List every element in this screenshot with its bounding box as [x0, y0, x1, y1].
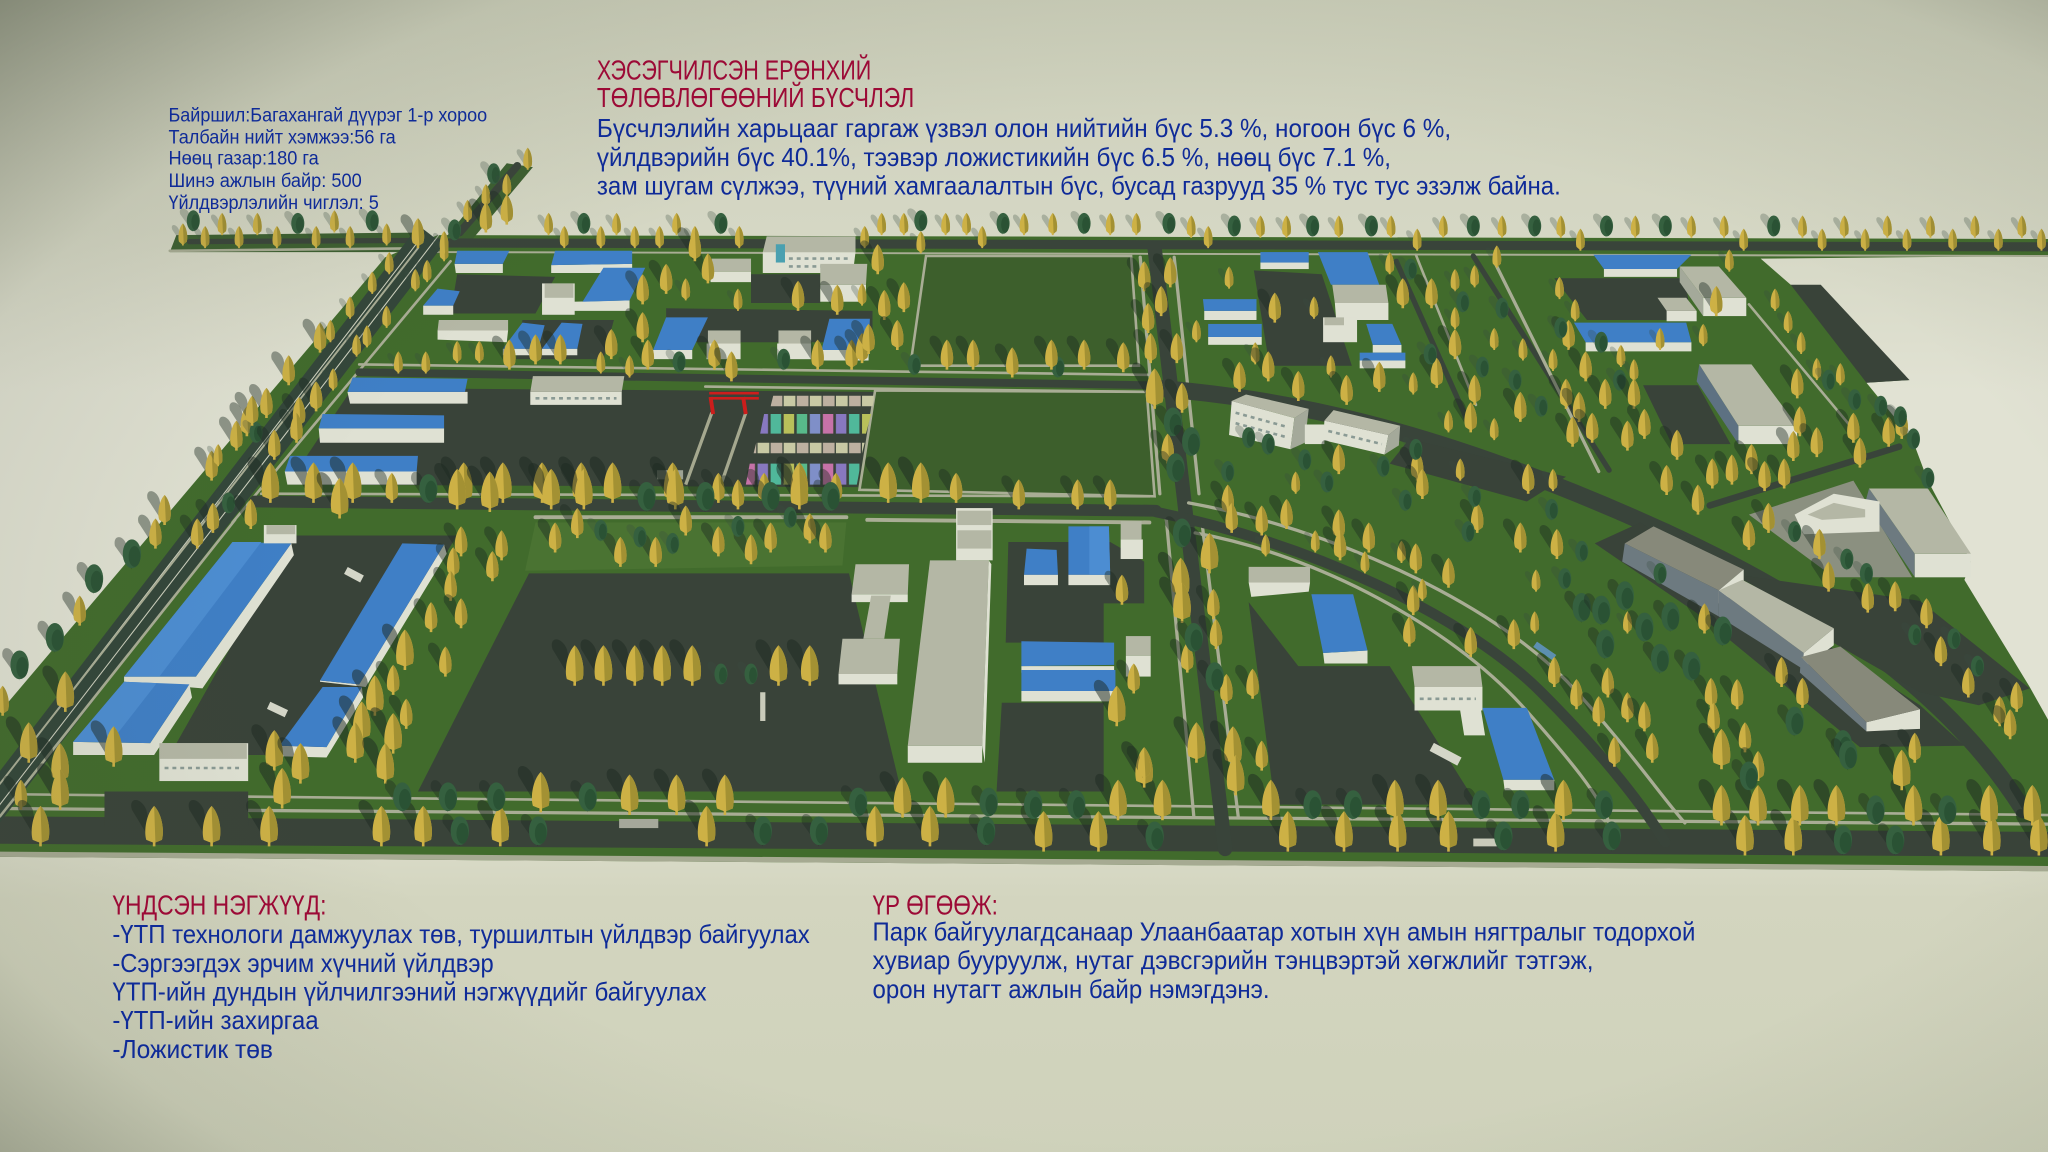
north field — [910, 256, 1139, 366]
east-west road one — [359, 372, 1156, 385]
west branch strip — [170, 232, 438, 252]
benefit text block — [872, 889, 1695, 1004]
office yard — [751, 274, 820, 303]
south-west entrance — [104, 792, 248, 825]
middle east-west row — [247, 456, 1116, 519]
vehicles — [267, 470, 1556, 846]
site facts text block — [168, 105, 487, 214]
building L — [551, 251, 632, 273]
north-south lanes — [1396, 261, 1468, 422]
connector block — [1305, 424, 1324, 444]
south-east yard — [1249, 602, 1477, 805]
north-west yard — [451, 274, 555, 313]
annex — [1459, 703, 1485, 735]
logistics terminal — [686, 393, 875, 485]
site facts text block: Үйлдвэрлэлийн чиглэл: 5 — [168, 193, 379, 214]
crane rails — [686, 413, 746, 485]
zoning description: үйлдвэрийн бүс 40.1%, тээвэр ложистикийн бүс 6.5 %, нөөц бүс 7.1 %, — [597, 142, 1391, 172]
building P — [438, 320, 508, 342]
building M — [572, 268, 645, 311]
building AH — [1260, 252, 1309, 269]
lawn above the main yard — [525, 522, 846, 571]
blue hall AB — [1068, 526, 1110, 585]
building X — [822, 319, 870, 360]
box F — [264, 525, 296, 543]
asphalt yards — [170, 270, 2030, 805]
building K — [455, 251, 509, 273]
zoning description — [597, 113, 1561, 201]
main units text block: -Сэргээгдэх эрчим хүчний үйлдвэр — [112, 948, 494, 978]
title: ТӨЛӨВЛӨГӨӨНИЙ БҮСЧЛЭЛ — [597, 82, 914, 113]
central road — [1155, 248, 1225, 849]
shed column trees — [251, 522, 508, 808]
blue hall AE — [1021, 641, 1114, 673]
building AT — [1697, 364, 1797, 444]
long plant Y — [908, 560, 991, 763]
shed yard — [170, 536, 457, 755]
benefit text block: ҮР ӨГӨӨЖ: — [872, 889, 998, 920]
west road trees — [0, 231, 448, 810]
title — [597, 55, 914, 113]
office C — [159, 743, 248, 781]
warehouse I — [285, 456, 418, 485]
box AD — [1121, 521, 1143, 559]
building AI — [1318, 252, 1379, 285]
apartment block two — [1323, 410, 1400, 455]
benefit text block: хувиар бууруулж, нутаг дэвсгэрийн тэнцвэртэй хөгжлийг тэтгэж, — [872, 945, 1593, 975]
zoning description: Бүсчлэлийн харьцааг гаргаж үзвэл олон нийтийн бүс 5.3 %, ногоон бүс 6 %, — [597, 113, 1451, 143]
site facts text block: Байршил:Багахангай дүүрэг 1-р хороо — [168, 105, 487, 126]
north road — [431, 243, 2048, 247]
main factory yard — [418, 573, 901, 792]
trees — [0, 148, 2048, 856]
apartment block one — [1229, 394, 1309, 449]
shed D — [320, 543, 447, 687]
H-shaped building — [839, 564, 909, 684]
green fields — [525, 256, 1155, 571]
building Q — [503, 323, 583, 355]
box T — [820, 264, 867, 302]
main units text block: ҮНДСЭН НЭГЖҮҮД: — [112, 889, 327, 920]
site facts text block: Шинэ ажлын байр: 500 — [168, 171, 362, 192]
north-west cluster trees — [387, 227, 1130, 381]
site facts text block: Нөөц газар:180 га — [168, 149, 319, 170]
north-east yards — [1554, 278, 1691, 320]
main office R — [763, 236, 856, 273]
main units text block: -Ложистик төв — [112, 1034, 273, 1064]
main units text block: -ҮТП технологи дамжуулах төв, туршилтын үйлдвэр байгуулах — [112, 919, 810, 949]
north-east curved road — [1155, 388, 2023, 810]
zoning description: зам шугам сүлжээ, түүний хамгаалалтын бүс, бусад газрууд 35 % тус тус эзэлж байна. — [597, 171, 1561, 201]
building AK — [1203, 299, 1256, 320]
container rows — [746, 396, 875, 485]
building AM — [1323, 317, 1357, 342]
building W — [777, 330, 811, 359]
south main road — [0, 816, 2048, 858]
building AR — [1657, 298, 1697, 321]
building AQ — [1680, 266, 1746, 316]
south-east curved road — [1156, 512, 1665, 842]
park trees — [1210, 425, 1921, 792]
main units text block: -ҮТП-ийн захиргаа — [112, 1005, 319, 1035]
lawn and yard trees — [538, 502, 832, 686]
buildings — [73, 236, 1971, 790]
site plan — [0, 148, 2048, 871]
office J — [530, 376, 624, 405]
arched hall two — [1800, 647, 1920, 731]
building BA — [1482, 708, 1554, 790]
building AX — [1311, 594, 1368, 664]
building AZ — [1412, 666, 1482, 711]
box S — [711, 259, 751, 282]
green site ground — [0, 235, 2048, 871]
shed B — [73, 682, 192, 755]
blue hall AF — [1021, 670, 1115, 701]
south block yard — [1006, 542, 1144, 643]
office block BD — [1719, 580, 1834, 669]
main units text block — [112, 889, 810, 1064]
main units text block: ҮТП-ийн дундын үйлчилгээний нэгжүүдийг байгуулах — [112, 976, 707, 1006]
building AS — [1574, 323, 1691, 351]
octagonal office — [1795, 494, 1880, 534]
building U — [653, 317, 708, 359]
road network — [0, 235, 2048, 871]
building AO — [1360, 353, 1405, 368]
west diagonal road — [0, 235, 431, 831]
perimeter parking — [1791, 285, 1910, 383]
access road strip — [447, 163, 533, 240]
building AP — [1593, 255, 1691, 277]
north rows — [172, 148, 2046, 251]
storage yard — [287, 388, 875, 487]
tower N — [542, 283, 575, 315]
site facts text block: Талбайн нийт хэмжээ:56 га — [168, 128, 396, 149]
blue hall AC — [1024, 549, 1058, 585]
building AL — [1208, 324, 1262, 345]
building V — [707, 330, 741, 359]
red gantry crane — [709, 393, 759, 414]
building AW — [1249, 567, 1310, 597]
tower Z — [956, 508, 993, 560]
title: ХЭСЭГЧИЛСЭН ЕРӨНХИЙ — [597, 55, 871, 86]
building AN — [1366, 324, 1401, 353]
arched hall one — [1622, 526, 1744, 616]
east-west road two — [255, 502, 1156, 511]
shed A — [124, 542, 294, 688]
east road trees — [1732, 499, 2023, 739]
warehouse G — [347, 377, 468, 404]
shed E — [280, 687, 363, 758]
south rows — [18, 766, 2048, 856]
central field — [859, 391, 1155, 496]
north-centre yard — [1254, 270, 1352, 366]
large building BF — [1865, 488, 1971, 577]
box AG — [1126, 636, 1151, 677]
central road trees — [1094, 253, 1268, 795]
warehouse H — [319, 414, 444, 443]
north-east block trees — [1185, 246, 1934, 515]
paved plaza — [1749, 481, 1912, 577]
benefit text block: Парк байгуулагдсанаар Улаанбаатар хотын хүн амын нягтралыг тодорхой — [872, 916, 1695, 946]
hall forecourt — [1595, 522, 1964, 747]
building AJ — [1332, 285, 1388, 320]
building O — [423, 289, 460, 315]
benefit text block: орон нутагт ажлын байр нэмэгдэнэ. — [872, 974, 1270, 1004]
